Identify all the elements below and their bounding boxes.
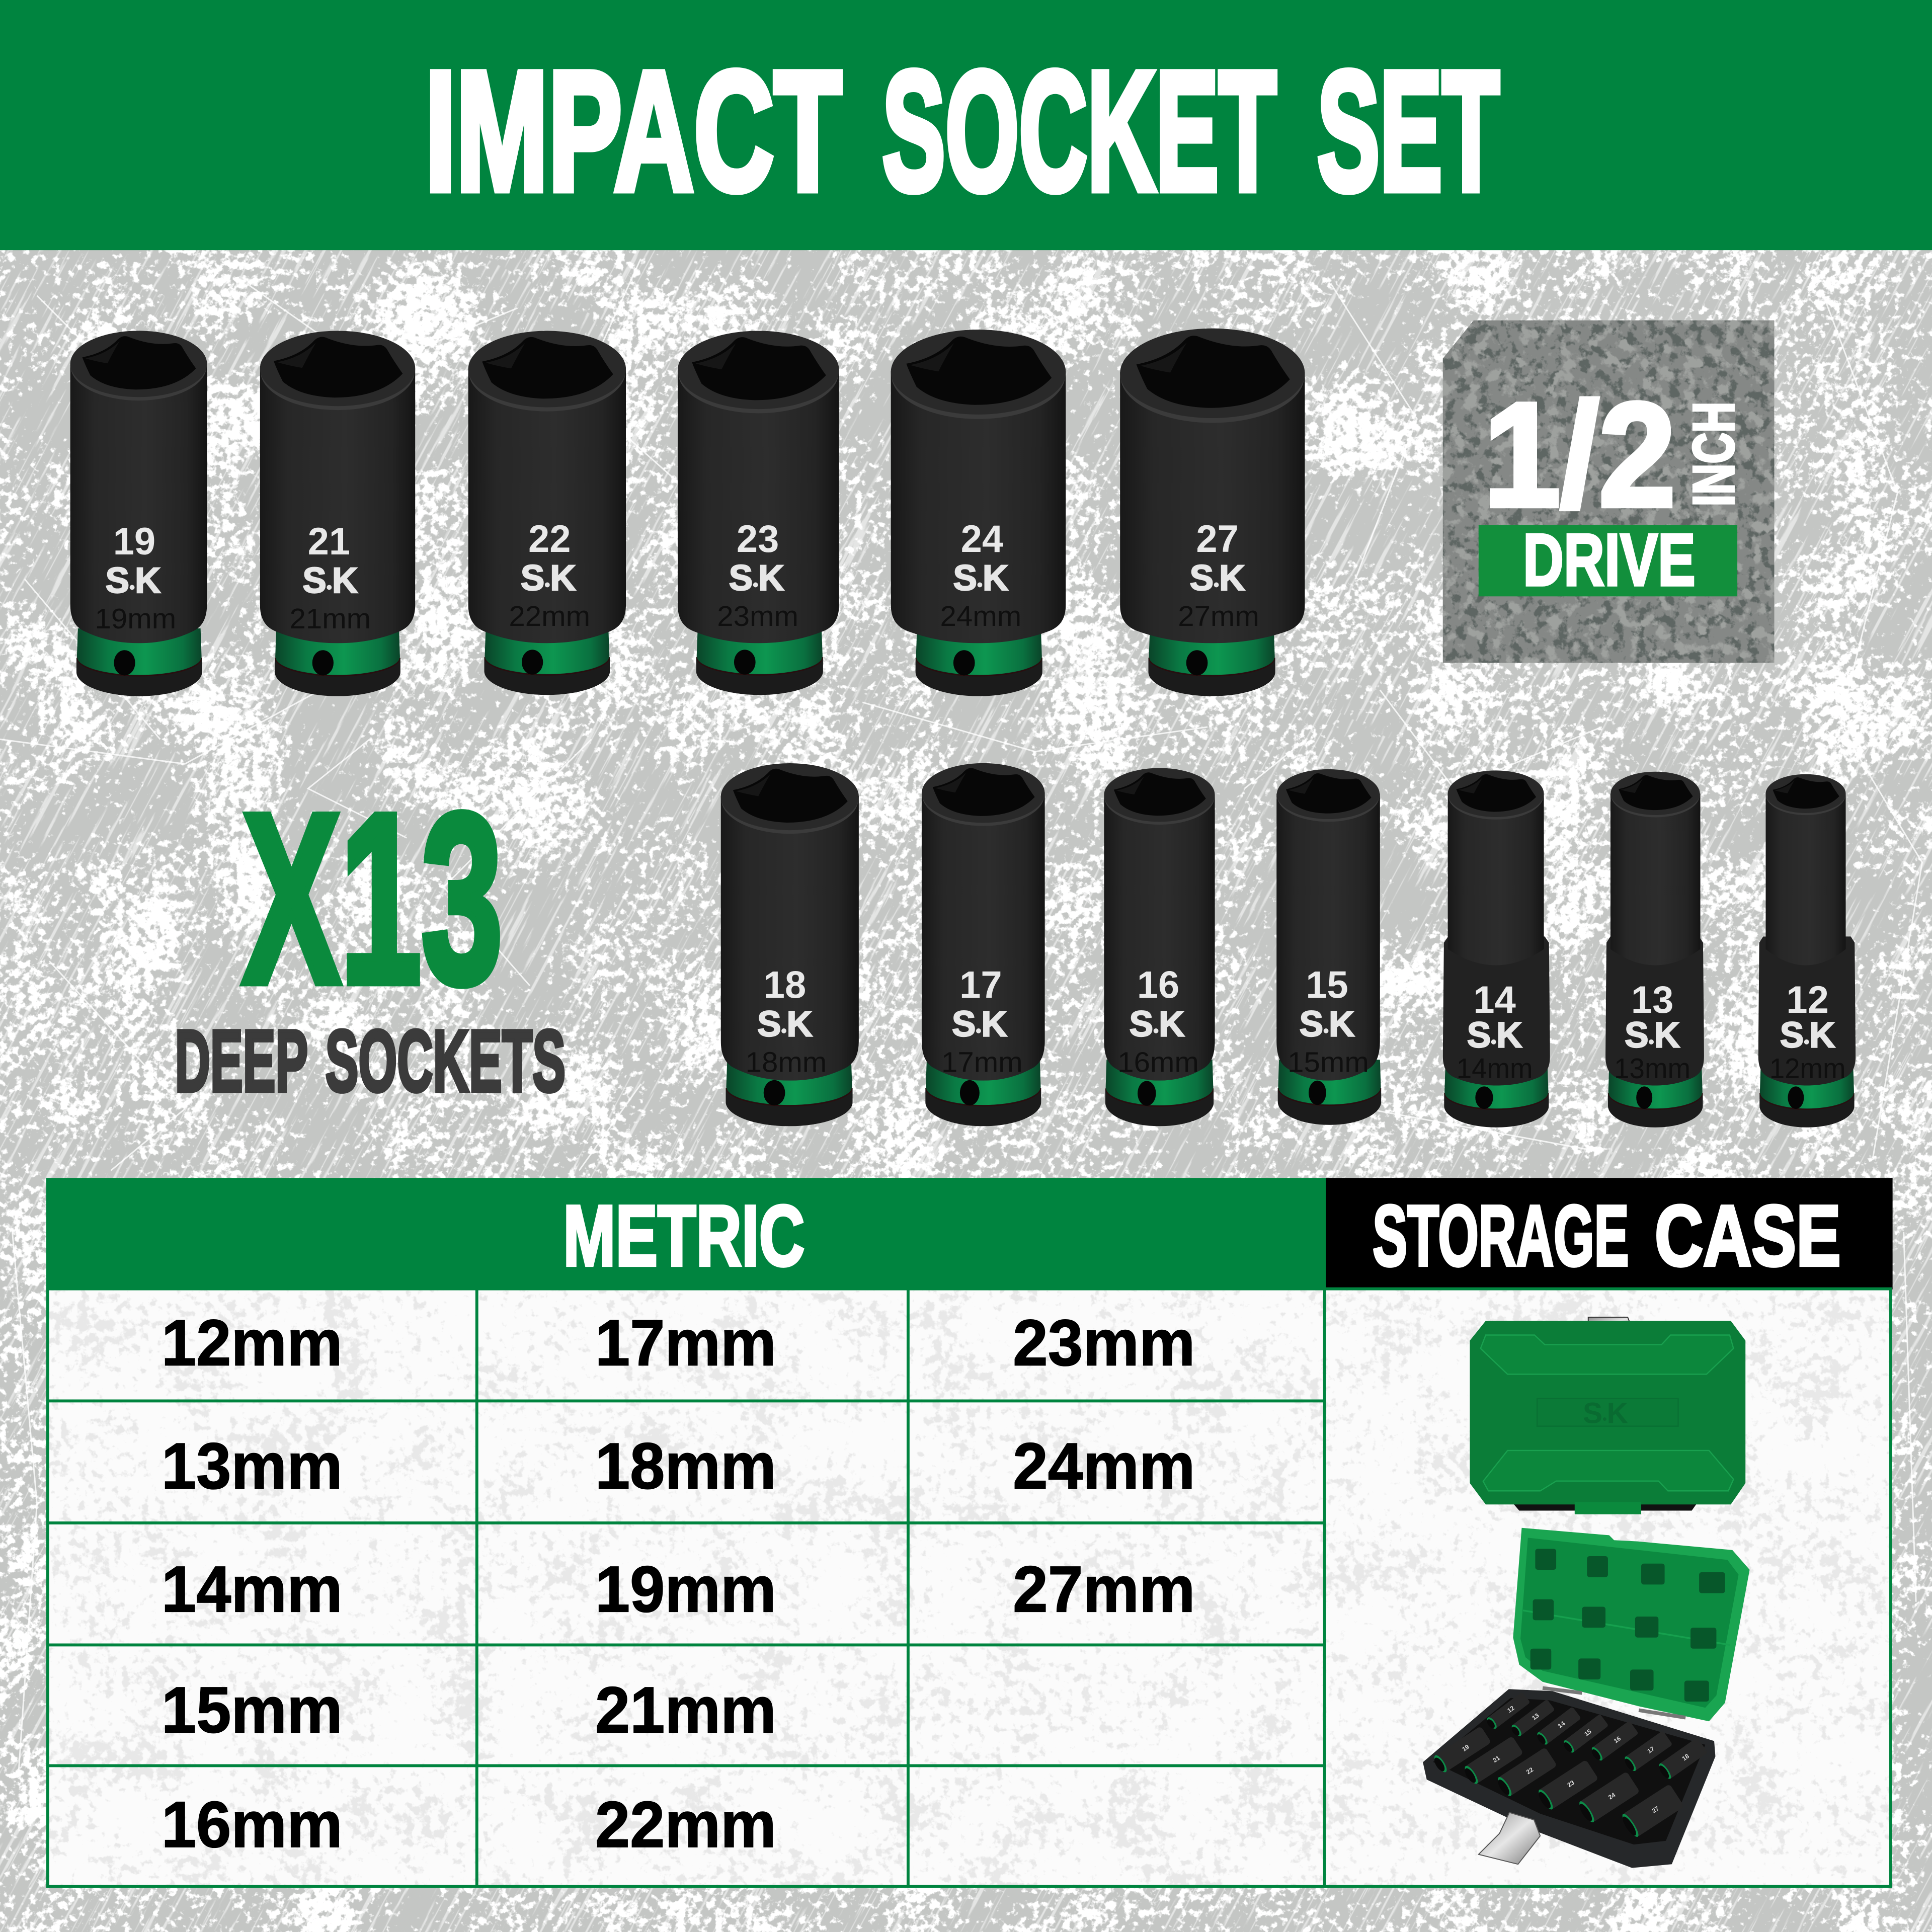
metric sizes column 2: 17mm [595, 1306, 776, 1379]
metric header: METRIC [563, 1188, 804, 1284]
socket 19mm [70, 331, 207, 696]
socket 17mm: 17 [959, 964, 1002, 1007]
socket 23mm: 23 [737, 518, 779, 560]
case latch [1588, 1317, 1633, 1329]
title text: SOCKET [882, 36, 1276, 226]
metric sizes column 3: 27mm [1013, 1553, 1195, 1626]
socket 14mm [1443, 770, 1550, 1128]
metric sizes column 1: 16mm [162, 1788, 343, 1861]
metric sizes column 1: 14mm [162, 1553, 343, 1626]
socket 24mm: 24mm [940, 600, 1021, 632]
socket 13mm [1605, 772, 1704, 1128]
socket 22mm: 22mm [509, 600, 590, 632]
storage case header: CASE [1655, 1188, 1841, 1284]
socket 23mm [678, 331, 839, 695]
socket 24mm: S•K [953, 558, 1008, 598]
hinge brackets [1543, 1688, 1685, 1718]
socket 17mm: 17mm [941, 1046, 1023, 1078]
socket 12mm [1758, 774, 1856, 1128]
metric sizes column 1: 12mm [162, 1306, 343, 1379]
quantity: X13 [243, 763, 503, 1033]
metric sizes column 2: 21mm [595, 1673, 776, 1746]
socket 24mm [891, 330, 1066, 696]
socket 22mm: 22 [528, 518, 571, 560]
chrome clasp [1479, 1812, 1540, 1864]
title text: IMPACT [425, 36, 842, 226]
metric sizes column 3: 24mm [1013, 1429, 1195, 1502]
badge unit: INCH [1682, 401, 1746, 507]
closed storage case [1470, 1317, 1745, 1514]
mini sockets in tray: 15 [1583, 1728, 1593, 1738]
socket 27mm: 27mm [1178, 600, 1259, 632]
metric sizes column 3 [1013, 1306, 1195, 1626]
storage case header [1326, 1178, 1893, 1290]
socket 18mm: 18mm [746, 1046, 827, 1078]
socket 23mm: 23mm [717, 600, 798, 632]
socket 12mm: 12mm [1769, 1053, 1846, 1084]
socket 18mm: 18 [764, 964, 806, 1007]
socket 13mm: S•K [1625, 1016, 1680, 1056]
socket 16mm: S•K [1130, 1005, 1185, 1044]
socket 14mm: S•K [1467, 1016, 1522, 1056]
socket 17mm: S•K [952, 1005, 1007, 1044]
badge: 1/2 inch drive [1443, 320, 1775, 663]
socket 21mm: S•K [302, 561, 358, 601]
socket 19mm: S•K [106, 561, 160, 601]
mini sockets in tray: 18 [1681, 1752, 1691, 1762]
socket 18mm [721, 763, 859, 1126]
socket 16mm: 16 [1137, 964, 1179, 1007]
socket 27mm [1120, 329, 1305, 696]
metric sizes column 1: 15mm [162, 1673, 343, 1746]
socket 12mm: S•K [1780, 1016, 1835, 1056]
socket 19mm: 19 [113, 520, 155, 563]
metric sizes column 2: 22mm [595, 1788, 776, 1861]
socket 27mm: 27 [1196, 518, 1239, 560]
socket 24mm: 24 [961, 518, 1003, 560]
mini sockets in tray: 22 [1525, 1766, 1535, 1776]
socket 23mm: S•K [729, 558, 784, 598]
table grid lines [47, 1289, 1891, 1886]
socket 15mm: S•K [1300, 1005, 1354, 1044]
socket 17mm [922, 763, 1045, 1126]
socket 22mm: S•K [521, 558, 576, 598]
open lid interior [1513, 1528, 1750, 1721]
mini sockets in tray [1431, 1692, 1708, 1839]
black tray [1423, 1689, 1715, 1868]
metric header [46, 1178, 1326, 1290]
mini sockets in tray: 14 [1557, 1720, 1566, 1730]
mini sockets in tray: 17 [1646, 1745, 1656, 1755]
case hinges [1512, 1502, 1698, 1510]
socket 21mm: 21 [308, 520, 350, 563]
mini sockets in tray: 19 [1461, 1743, 1471, 1753]
tray interior [1433, 1698, 1705, 1844]
title banner [0, 0, 1932, 250]
socket 27mm: S•K [1190, 558, 1245, 598]
metric sizes column 2 [595, 1306, 776, 1861]
socket 13mm: 13 [1631, 979, 1673, 1021]
lid logo plate [1537, 1397, 1678, 1430]
metric sizes column 2: 19mm [595, 1553, 776, 1626]
bottom row of slimmer deep sockets [721, 763, 1856, 1128]
mini sockets in tray: 12 [1506, 1705, 1516, 1714]
quantity caption: DEEP [175, 1012, 308, 1110]
socket 22mm [468, 331, 626, 695]
socket 12mm: 12 [1786, 979, 1829, 1021]
top row of large deep sockets [70, 329, 1305, 696]
metric sizes column 2: 18mm [595, 1429, 776, 1502]
socket 15mm [1276, 769, 1381, 1125]
mini sockets in tray: 16 [1613, 1735, 1622, 1745]
title text: SET [1317, 36, 1499, 226]
socket 16mm [1104, 768, 1215, 1126]
socket 14mm: 14 [1473, 979, 1516, 1021]
table cell background [47, 1289, 1891, 1888]
badge drive strip: DRIVE [1523, 519, 1696, 601]
socket 16mm: 16mm [1117, 1046, 1199, 1078]
storage case header: STORAGE [1373, 1188, 1629, 1284]
badge fraction: 1/2 [1484, 372, 1676, 537]
socket 19mm: 19mm [95, 603, 176, 634]
metric sizes column 3: 23mm [1013, 1306, 1195, 1379]
mini sockets in tray: 23 [1566, 1779, 1576, 1789]
socket 21mm: 21mm [290, 603, 371, 634]
socket 21mm [260, 331, 415, 696]
metric sizes column 1 [162, 1306, 343, 1861]
mini sockets in tray: 21 [1492, 1754, 1501, 1764]
open storage case [1423, 1528, 1750, 1868]
mini sockets in tray: 27 [1651, 1805, 1660, 1814]
callout: x13 deep sockets [175, 763, 566, 1110]
socket 13mm: 13mm [1614, 1053, 1691, 1084]
lid logo plate: S•K [1583, 1397, 1628, 1430]
quantity caption: SOCKETS [326, 1012, 566, 1110]
socket 15mm: 15mm [1287, 1046, 1369, 1078]
mini sockets in tray: 13 [1531, 1712, 1541, 1722]
size table panel [46, 1178, 1893, 1888]
socket 14mm: 14mm [1457, 1053, 1533, 1084]
mini sockets in tray: 24 [1607, 1791, 1617, 1801]
socket 18mm: S•K [757, 1005, 813, 1044]
metric sizes column 1: 13mm [162, 1429, 343, 1502]
socket 15mm: 15 [1306, 964, 1348, 1007]
